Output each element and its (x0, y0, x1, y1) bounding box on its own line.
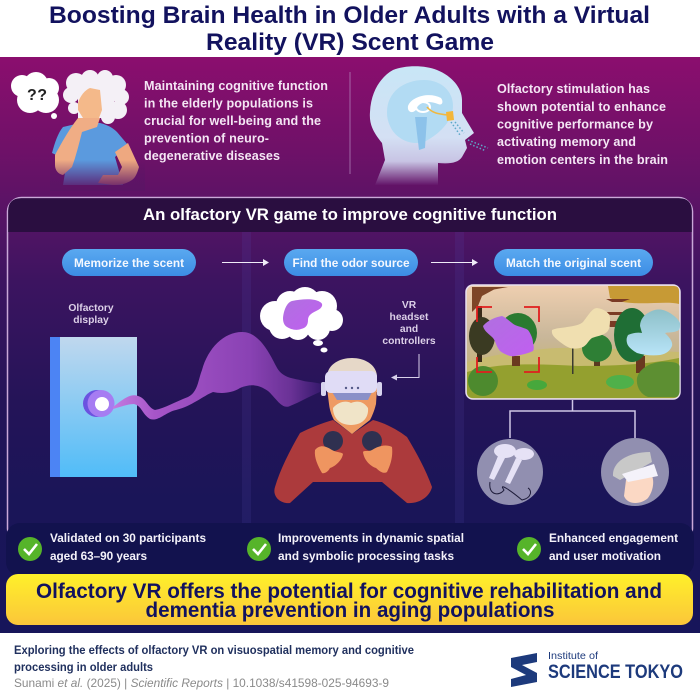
step 2 pill (284, 249, 418, 276)
panel heading: An olfactory VR game to improve cognitive function (143, 206, 557, 224)
logo: Institute of Science Tokyo: Institute of (548, 650, 598, 662)
finding 1: aged 63–90 years (50, 549, 147, 563)
finding 3: Enhanced engagement (549, 531, 678, 545)
bush right (637, 362, 680, 397)
label: VR headset and controllers: controllers (382, 336, 436, 347)
hair (327, 358, 377, 392)
arm on hip (98, 143, 139, 185)
conclusion banner: Olfactory VR offers the potential for cognitive rehabilitation and (36, 579, 662, 603)
olfactory display device (50, 337, 137, 477)
text: olfactory stimulation: cognitive performance by (497, 118, 653, 132)
checklist: key findings (6, 523, 694, 576)
finding 1: Validated on 30 participants (50, 531, 206, 545)
text: olfactory stimulation: shown potential to enhance (497, 100, 666, 114)
text: olfactory stimulation: emotion centers in the brain (497, 153, 668, 167)
check 2 (247, 537, 271, 561)
arrow: to headset (391, 354, 419, 380)
road and ground (467, 348, 679, 398)
blue scent blob (627, 309, 680, 355)
text: olfactory stimulation: activating memory and (497, 135, 636, 149)
tree left (469, 287, 508, 362)
finding 2 (278, 531, 464, 563)
plants (527, 380, 547, 390)
citation: processing in older adults (14, 662, 153, 674)
cream scent blob (552, 308, 610, 349)
column dividers (242, 232, 251, 524)
title (49, 3, 650, 56)
conclusion banner (6, 574, 693, 625)
logo: Institute of Science Tokyo (511, 650, 683, 687)
connector lines (510, 400, 635, 438)
tree behind purple blob (499, 313, 537, 353)
text: cognitive function: degenerative diseases (144, 149, 280, 163)
fade overlay (50, 160, 145, 191)
finding 2: Improvements in dynamic spatial (278, 531, 464, 545)
step 3 pill: Match the original scent (506, 256, 641, 270)
finding 1 (50, 531, 206, 563)
text: olfactory stimulation: Olfactory stimulation has (497, 82, 650, 96)
label: olfactory display (68, 303, 114, 326)
text: cognitive function (144, 79, 328, 163)
controllers (323, 431, 343, 451)
brown tree right (606, 299, 630, 327)
brain (387, 80, 453, 143)
target frame (477, 307, 539, 372)
face (78, 88, 102, 118)
shirt (52, 123, 128, 185)
hand on chin (55, 118, 100, 175)
hands (315, 446, 343, 473)
conclusion banner: dementia prevention in aging populations (146, 598, 555, 622)
scene: virtual park (466, 285, 680, 399)
step 1 pill (62, 249, 196, 276)
face and neck (327, 388, 377, 434)
olfactory bulb (446, 111, 454, 121)
text: cognitive function: crucial for well-being and the (144, 114, 321, 128)
title: Boosting Brain Health in Older Adults with a Virtual (49, 3, 650, 29)
olfactory nerve (427, 107, 448, 115)
arrow 2 (431, 259, 478, 266)
text: cognitive function: in the elderly populations is (144, 96, 313, 110)
logo mark (511, 653, 537, 687)
finding 3: and user motivation (549, 549, 661, 563)
panel: olfactory VR game (6, 198, 694, 576)
citation (14, 645, 414, 690)
finding 2: and symbolic processing tasks (278, 549, 454, 563)
arrow 1 (222, 259, 269, 266)
icon: controllers (477, 439, 543, 505)
label: VR headset and controllers: headset (390, 312, 429, 323)
text: olfactory stimulation (497, 82, 668, 167)
label: VR headset and controllers: VR (402, 300, 417, 311)
scent particles (451, 122, 488, 151)
label: VR headset and controllers (382, 300, 436, 347)
illustration: thinking woman (11, 70, 145, 191)
sweater (274, 420, 432, 503)
head silhouette (370, 66, 474, 185)
thought bubble with scent (260, 287, 343, 352)
label: olfactory display: Olfactory (68, 303, 114, 314)
check 1 (18, 537, 42, 561)
beard (333, 402, 368, 425)
hair (63, 70, 129, 124)
illustration: head with brain (370, 66, 488, 185)
step 1 pill: Memorize the scent (74, 256, 184, 270)
citation: Exploring the effects of olfactory VR on visuospatial memory and cognitive (14, 645, 414, 657)
text: cognitive function: Maintaining cognitive function (144, 79, 328, 93)
tree right (614, 308, 650, 373)
icon: user wearing headset (601, 438, 669, 506)
label: VR headset and controllers: and (400, 324, 418, 335)
golden canopy (608, 286, 679, 304)
tree middle (582, 334, 612, 366)
step 2 pill: Find the odor source (292, 256, 410, 270)
title: Reality (VR) Scent Game (206, 30, 494, 56)
panel heading (8, 198, 692, 232)
label: olfactory display: display (73, 315, 109, 326)
thought bubble: ?? (27, 87, 47, 104)
illustration: man with VR headset (274, 358, 432, 503)
purple scent blob (483, 316, 534, 356)
scent emitter (83, 390, 114, 417)
headset (321, 371, 382, 400)
text: cognitive function: prevention of neuro- (144, 132, 269, 146)
brainstem (415, 117, 427, 150)
scent plume (113, 332, 322, 420)
finding 3 (549, 531, 678, 563)
corpus callosum (408, 95, 442, 112)
citation: Sunami et al. (2025) | Scientific Reports | 10.1038/s41598-025-94693-9 (14, 676, 389, 690)
step 3 pill (494, 249, 653, 276)
lamp post (570, 337, 576, 374)
check 3 (517, 537, 541, 561)
bush left (468, 366, 498, 396)
